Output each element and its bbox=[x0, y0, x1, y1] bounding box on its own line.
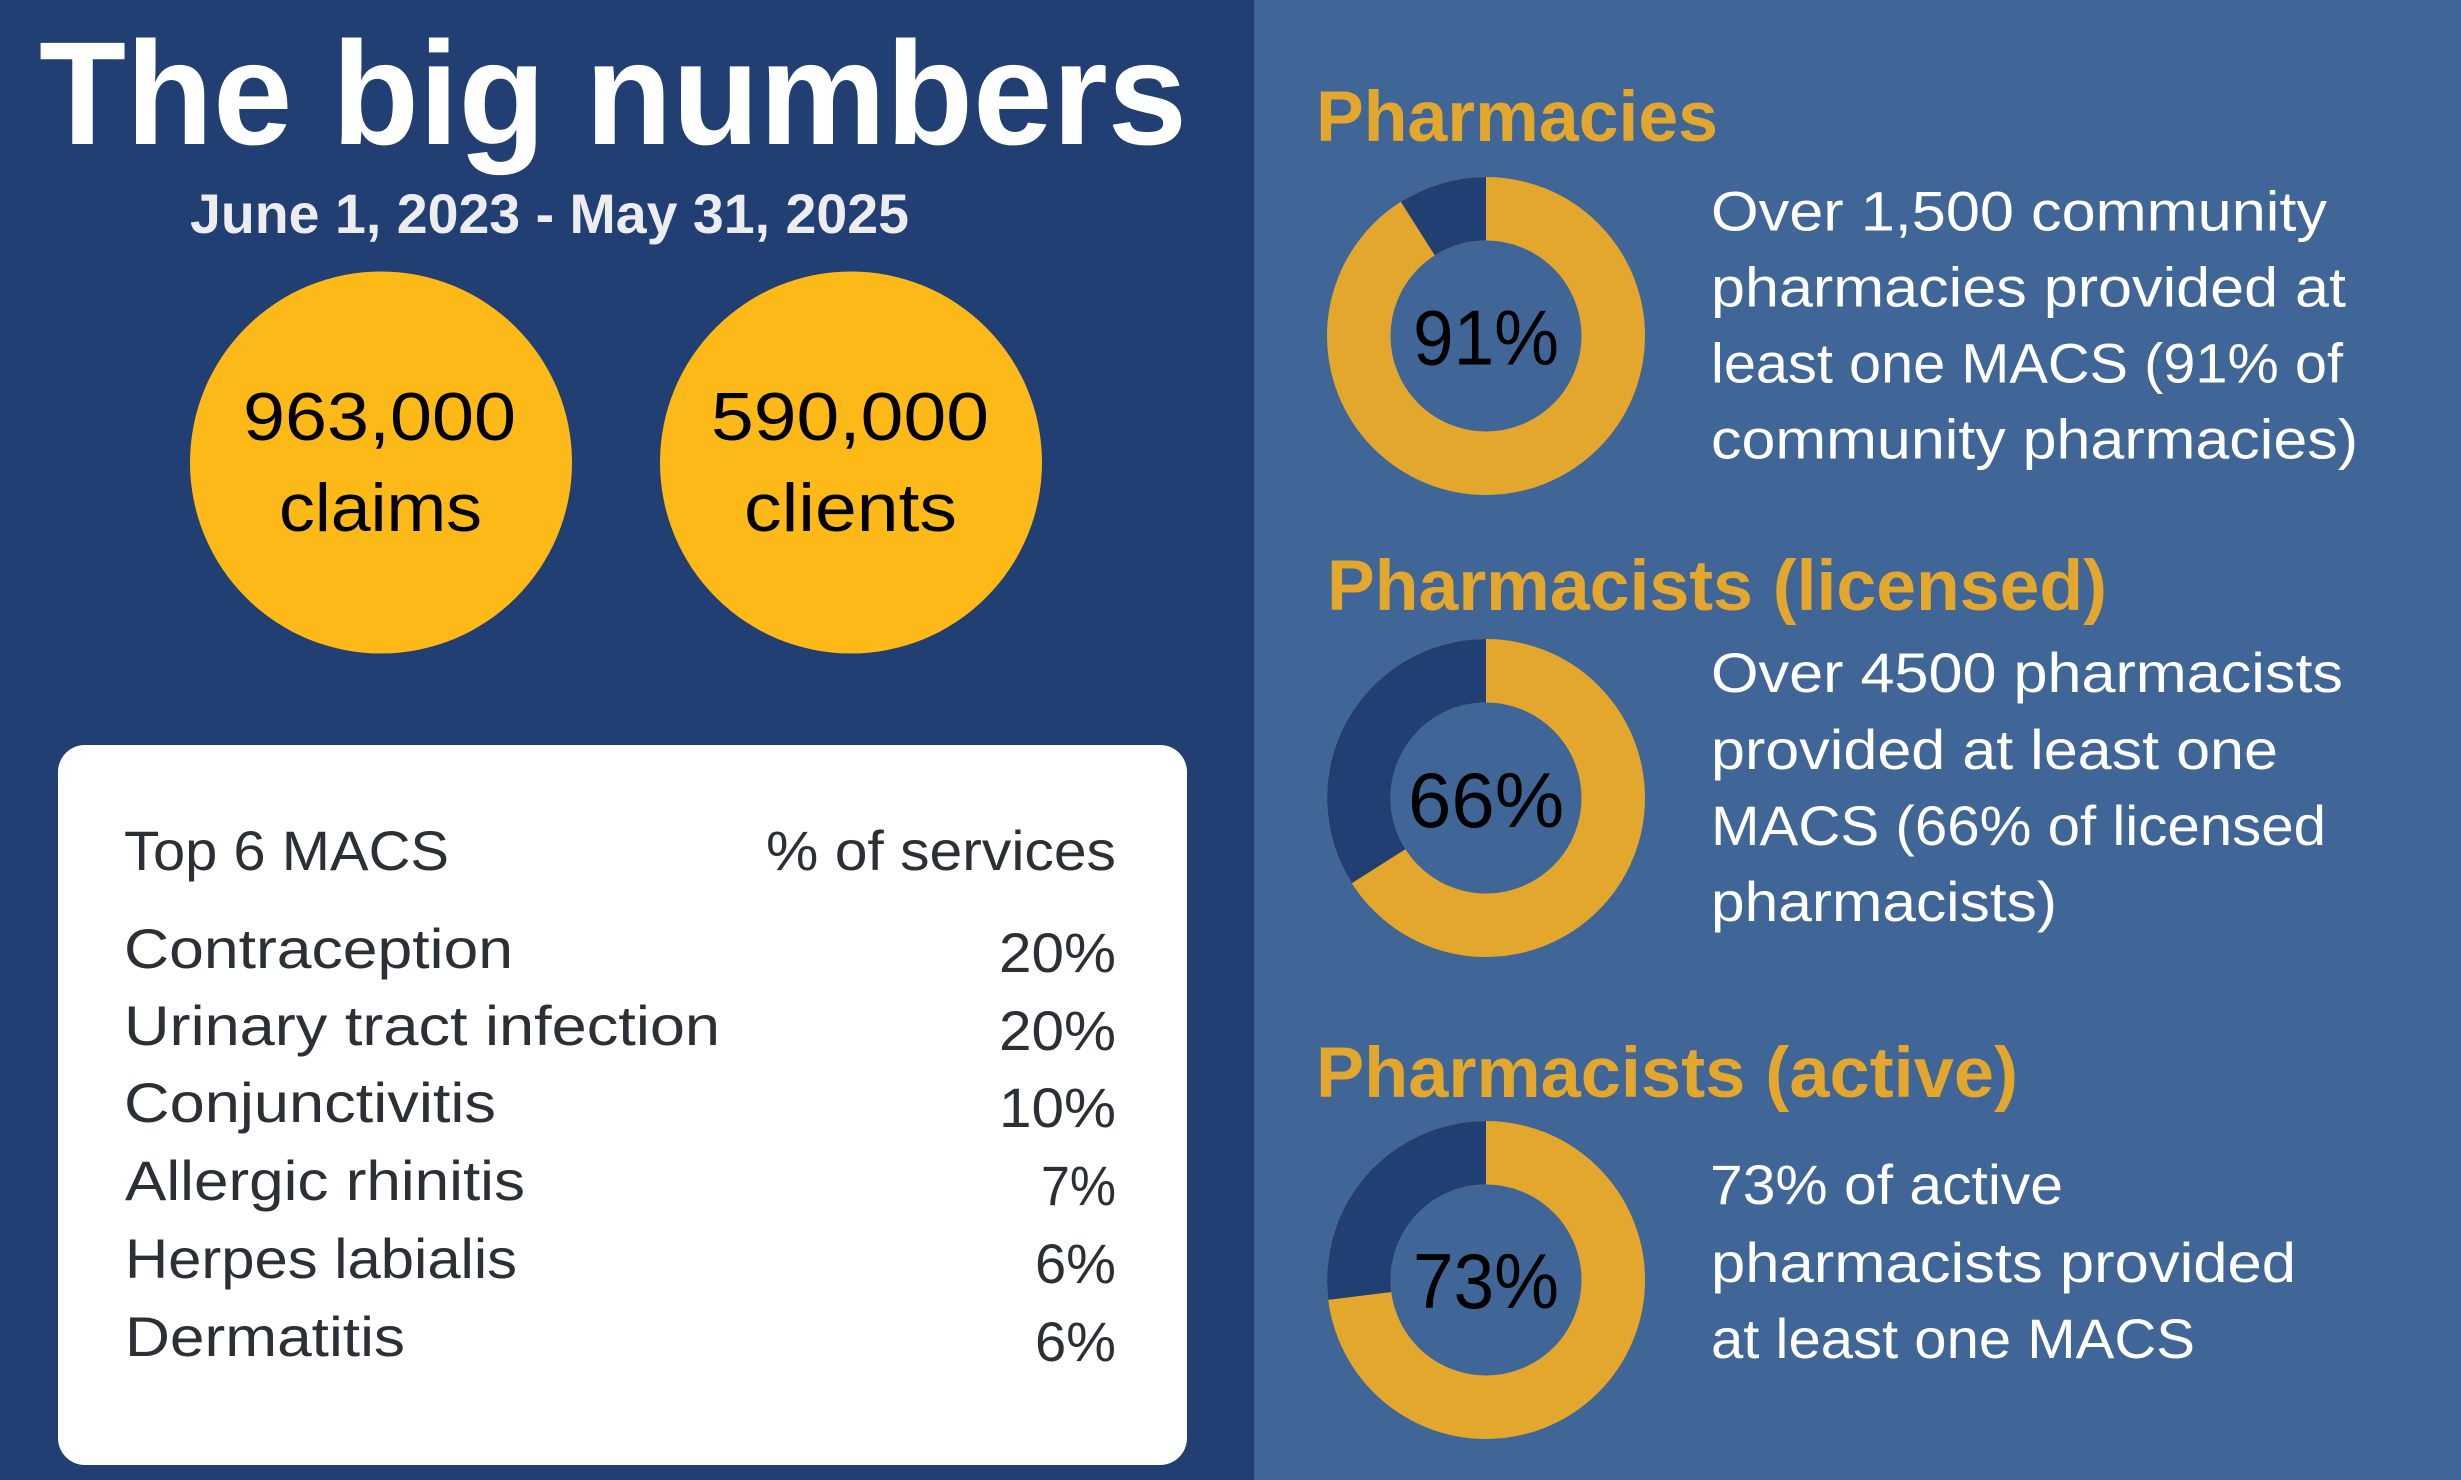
donut chart: 73%: 73% bbox=[1413, 1237, 1559, 1325]
panel: top 6 MACS table bbox=[58, 745, 1187, 1465]
panel: left big numbers bbox=[0, 0, 1254, 1480]
description: pharmacies: least one MACS (91% of bbox=[1711, 332, 2343, 394]
donut chart: 91% bbox=[1359, 177, 1613, 463]
description: active pharmacists bbox=[1710, 1153, 2296, 1370]
table header: % of services: % of services bbox=[766, 819, 1116, 882]
row: Conjunctivitis: Conjunctivitis bbox=[124, 1071, 496, 1134]
donut chart: 91%: 91% bbox=[1413, 294, 1559, 382]
section: Pharmacists (licensed) bbox=[1327, 547, 2343, 933]
donut chart: 66% bbox=[1327, 639, 1613, 925]
row: Dermatitis: Dermatitis bbox=[125, 1305, 405, 1368]
description: active pharmacists: at least one MACS bbox=[1711, 1307, 2195, 1370]
row: Conjunctivitis bbox=[124, 1071, 1116, 1139]
description: licensed pharmacists: MACS (66% of licensed bbox=[1711, 794, 2326, 857]
row: Dermatitis: 6% bbox=[1035, 1310, 1116, 1373]
row: Herpes labialis bbox=[125, 1227, 1116, 1295]
row: Conjunctivitis: 10% bbox=[999, 1076, 1116, 1139]
heading: Pharmacies: Pharmacies bbox=[1316, 78, 1718, 157]
heading: Pharmacists (licensed): Pharmacists (licensed) bbox=[1327, 547, 2107, 626]
panel: right breakdown bbox=[1254, 0, 2461, 1480]
description: active pharmacists: 73% of active bbox=[1710, 1153, 2063, 1216]
stat circle: claims bbox=[190, 272, 572, 654]
section: Pharmacists (active) bbox=[1316, 1034, 2296, 1407]
description: licensed pharmacists: provided at least one bbox=[1711, 718, 2278, 781]
row: Urinary tract infection bbox=[124, 994, 1116, 1062]
description: licensed pharmacists: Over 4500 pharmacists bbox=[1711, 641, 2343, 704]
row: Allergic rhinitis bbox=[125, 1149, 1116, 1217]
title: The big numbers bbox=[39, 12, 1187, 176]
stat circle: clients bbox=[660, 272, 1042, 654]
description: licensed pharmacists bbox=[1711, 641, 2343, 933]
stat circle: claims: claims bbox=[279, 470, 482, 546]
description: licensed pharmacists: pharmacists) bbox=[1711, 870, 2057, 933]
row: Herpes labialis: 6% bbox=[1035, 1232, 1116, 1295]
stat circle: clients: 590,000 bbox=[711, 379, 989, 455]
row: Contraception bbox=[124, 917, 1116, 984]
row: Urinary tract infection: Urinary tract infection bbox=[124, 994, 720, 1057]
section: Pharmacies bbox=[1316, 78, 2358, 470]
table header: Top 6 MACS: Top 6 MACS bbox=[124, 819, 449, 882]
stat circle: claims: 963,000 bbox=[243, 379, 516, 455]
row: Contraception: 20% bbox=[999, 921, 1116, 984]
row: Allergic rhinitis: Allergic rhinitis bbox=[125, 1149, 525, 1212]
stat circle: clients: clients bbox=[744, 470, 957, 546]
description: active pharmacists: pharmacists provided bbox=[1711, 1231, 2296, 1294]
row: Herpes labialis: Herpes labialis bbox=[125, 1227, 517, 1290]
row: Urinary tract infection: 20% bbox=[999, 999, 1116, 1062]
heading: Pharmacists (active): Pharmacists (active) bbox=[1316, 1034, 2018, 1113]
row: Allergic rhinitis: 7% bbox=[1041, 1154, 1116, 1217]
donut chart: 73% bbox=[1327, 1121, 1613, 1407]
donut chart: 66%: 66% bbox=[1408, 756, 1564, 844]
description: pharmacies: community pharmacies) bbox=[1711, 408, 2358, 470]
row: Dermatitis bbox=[125, 1305, 1116, 1373]
description: pharmacies bbox=[1711, 180, 2358, 470]
description: pharmacies: Over 1,500 community bbox=[1711, 180, 2327, 242]
description: pharmacies: pharmacies provided at bbox=[1711, 256, 2346, 318]
row: Contraception: Contraception bbox=[124, 917, 513, 980]
date range subtitle: June 1, 2023 - May 31, 2025 bbox=[190, 182, 909, 245]
